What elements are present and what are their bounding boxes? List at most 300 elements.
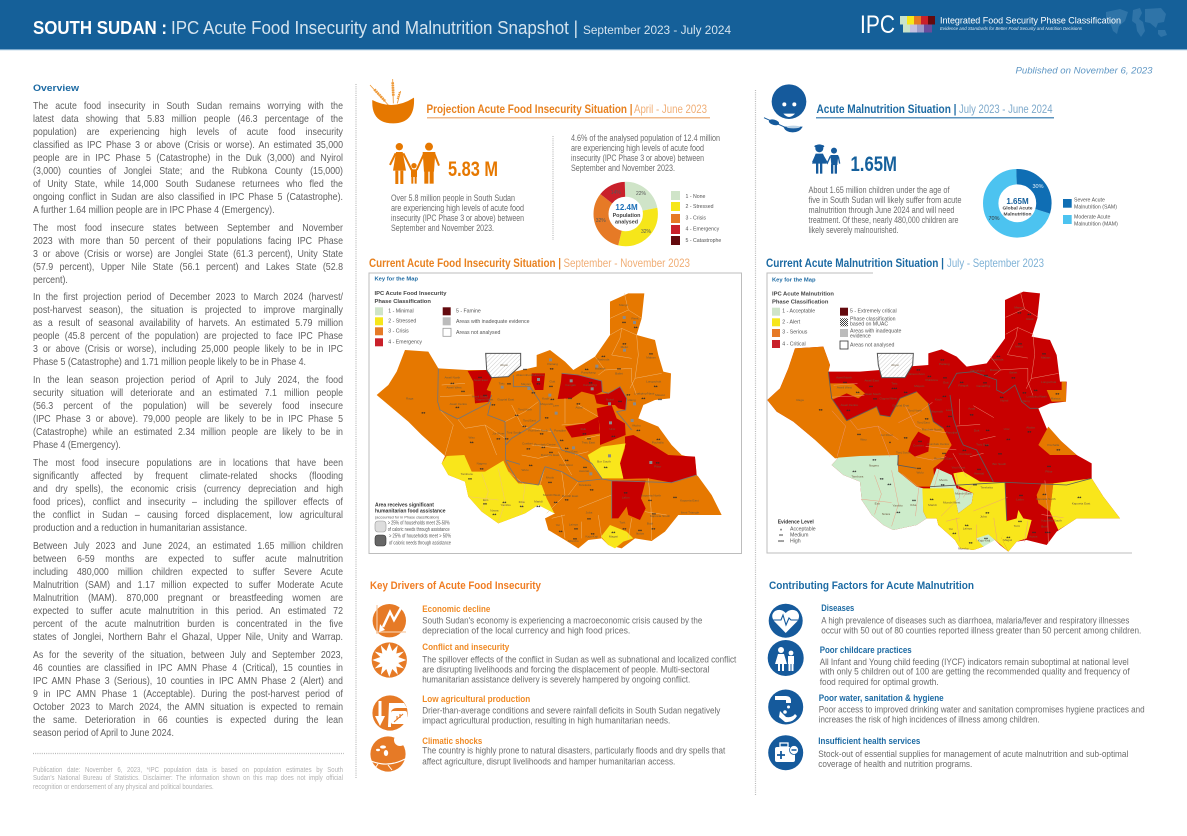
description right: 4.6% of the analysed population of 12.4 million [571, 133, 720, 143]
evidence markers: ** [470, 440, 474, 446]
county labels: Rumbek Centre [534, 442, 556, 446]
county labels: Mundri West [543, 493, 560, 497]
county labels: Lafon [1016, 497, 1024, 501]
driver text: conflict: Conflict and insecurity [422, 642, 509, 652]
evidence markers: ** [480, 467, 484, 473]
evidence markers: ** [587, 437, 591, 443]
driver text: economic decline: South Sudan's economy is experiencing a macroeconomic crisis caused by the [422, 616, 702, 626]
map legend: phases: 1 - Acceptable [782, 309, 815, 315]
county labels: Fashoda [597, 358, 610, 362]
evidence markers: ** [656, 438, 660, 444]
evidence markers: ** [970, 413, 974, 419]
paragraph 6: including 480,000 million children expected to suffer Severe Acute [33, 567, 343, 578]
county labels: Ezo [875, 501, 880, 505]
county labels: Mundri West [943, 500, 960, 504]
county labels: Rumbek East [934, 456, 953, 460]
county labels: Mayom [521, 382, 531, 386]
evidence markers: ** [658, 398, 662, 404]
map legend: phases: 3 - Crisis [388, 329, 409, 335]
evidence markers: ** [942, 451, 946, 457]
county labels: Longochuk [646, 379, 662, 383]
county labels: Akobo [1026, 425, 1035, 429]
county labels: Canal/Pigi [976, 384, 991, 388]
evidence markers: ** [565, 446, 569, 452]
county labels: Nagero [477, 461, 487, 465]
map legend: phases: evidence [850, 333, 871, 339]
evidence markers: ** [634, 325, 638, 331]
description left: Over 5.8 million people in South Sudan [391, 193, 515, 203]
evidence markers: ** [1027, 313, 1031, 319]
evidence markers: ** [927, 374, 931, 380]
donut legend: 1 - None [686, 194, 706, 200]
donut chart: SAM and MAM: 1.65M [1006, 197, 1029, 206]
section heading: April - June 2023 [634, 102, 707, 116]
county labels: Ezo [483, 498, 489, 502]
county labels: Ulang [1022, 399, 1030, 403]
county labels: Tonj East [523, 419, 536, 423]
evidence markers: ** [846, 409, 850, 415]
paragraph 1: classified as IPC Phase 3 or above (Crisis or worse). An estimated 35,000 [33, 140, 343, 151]
paragraph 7: season period of April to June 2024. [33, 728, 174, 739]
evidence markers: ** [526, 447, 530, 453]
overview heading: Overview [33, 83, 80, 94]
Abyei not analysed area [486, 353, 521, 378]
county labels: Gogrial East [497, 397, 514, 401]
evidence markers: *** [891, 386, 897, 392]
evidence markers: ** [872, 458, 876, 464]
evidence markers: ** [638, 529, 642, 535]
icon: diseases heart [769, 604, 803, 638]
paragraph 4: (Catastrophe) while an estimated 2.34 million people are likely to be in [33, 427, 343, 438]
county labels: Gogrial East [892, 404, 909, 408]
county labels: Tonj North [908, 409, 922, 413]
county labels: Ayod [968, 406, 975, 410]
county labels: Twic [499, 381, 505, 385]
county labels: Melut [621, 345, 628, 349]
paragraph 2: 3 or above (Crisis or worse) are Jonglei State (61.3 percent), Unity State [33, 249, 343, 260]
evidence markers: * [889, 440, 891, 446]
header banner [0, 0, 1187, 50]
evidence markers: ** [565, 498, 569, 504]
county labels: Mundri East [562, 494, 578, 498]
paragraph 3: Phase 5 (Catastrophe) and 1.71 million people likely to be in Phase 4. [33, 357, 306, 368]
county labels: Baliet [615, 371, 623, 375]
county labels: Torit [1014, 524, 1020, 528]
evidence markers: ** [819, 408, 823, 414]
county labels: Renk [1026, 317, 1034, 321]
donut chart: SAM and MAM: Malnutrition [1004, 212, 1032, 218]
donut chart: population phases: 32% [596, 218, 606, 224]
publication date: Published on November 6, 2023 [1016, 66, 1153, 76]
evidence markers [819, 311, 1081, 547]
county labels: Ibba [519, 500, 525, 504]
paragraph 6: Malnutrition (SAM) and 1.17 million expected to suffer Moderate Acute [33, 580, 343, 591]
donut chart: population phases: 12.4M [615, 203, 638, 212]
description: likely severely malnourished. [808, 225, 898, 235]
evidence markers: ** [483, 394, 487, 400]
evidence markers: ** [589, 381, 593, 387]
evidence markers: ** [1019, 493, 1023, 499]
evidence markers: *** [1045, 530, 1051, 536]
paragraph 7: IPC AMN Phase 3 (Serious), 10 counties in IPC AMN Phase 2 (Alert) and [33, 676, 343, 687]
county labels: Abyei [500, 363, 508, 367]
evidence markers: ** [912, 499, 916, 505]
map legend: evidence level: * [780, 528, 783, 534]
driver text: climate: affect agriculture, disrupt livelihoods and hamper humanitarian access. [422, 757, 675, 767]
section heading: Key Drivers of Acute Food Insecurity [370, 580, 542, 592]
county labels: Wulu [522, 468, 529, 472]
evidence markers: ** [930, 498, 934, 504]
county labels: Gogrial West [475, 397, 493, 401]
county labels: Yirol West [559, 463, 573, 467]
map legend: phases: IPC Acute Food Insecurity [374, 291, 447, 297]
map legend: evidence level: Medium [790, 532, 808, 538]
county labels: Koch [542, 396, 549, 400]
county labels: Malakal [990, 368, 1001, 372]
evidence markers: ** [856, 390, 860, 396]
factor text: diseases: Diseases [821, 603, 854, 613]
county labels: Yambio [501, 503, 511, 507]
icon: wheat bowl [370, 79, 414, 123]
stat: 1.65M: 1.65M [850, 152, 897, 176]
county labels: Kapoeta North [641, 494, 661, 498]
evidence markers: ** [656, 461, 660, 467]
paragraph 1: (3,000) counties of Jonglei State; and the Rubkona County (15,000) [33, 166, 343, 177]
paragraph 2: (57.9 percent), Upper Nile State (56.1 percent) and Lakes State (52.8 [33, 262, 343, 273]
paragraph 5: the conflict in Sudan – causing forced displacement, low agricultural [33, 510, 343, 521]
county labels: Maban [1041, 356, 1051, 360]
evidence markers: ** [568, 396, 572, 402]
county labels: Abiemnhom [516, 373, 533, 377]
map legend: food assistance: Area receives significant [375, 503, 434, 509]
evidence markers: ** [450, 381, 454, 387]
map legend: phases: Areas with inadequate [850, 329, 901, 335]
map legend: evidence level: Evidence Level [778, 520, 814, 526]
county labels: Tambura [461, 472, 473, 476]
heading: current food insecurity: September - November 2023 [564, 256, 690, 270]
evidence markers: ** [536, 382, 540, 388]
map legend: phases: Key for the Map [374, 277, 418, 283]
county labels: Akobo [632, 424, 641, 428]
donut legend: 3 - Crisis [686, 216, 706, 222]
evidence markers: ** [962, 448, 966, 454]
county labels: Aweil North [836, 376, 852, 380]
evidence markers: ** [622, 342, 626, 348]
map legend: food assistance: > 25% of households meet 25-50% [388, 520, 450, 526]
map legend: phases [374, 277, 530, 346]
driver text: climate: Climatic shocks [422, 736, 482, 746]
paragraph 7: October 2023 to March 2024, the AMN situation is expected to remain [33, 702, 343, 713]
county labels: Kajo-Keji [586, 535, 598, 539]
state boundaries [438, 368, 697, 518]
icon: climatic shocks [370, 734, 406, 772]
evidence markers: ** [549, 384, 553, 390]
county labels: Wau [860, 437, 867, 441]
evidence markers: ** [941, 483, 945, 489]
donut chart: SAM and MAM: 70% [988, 216, 1000, 222]
evidence markers: ** [1006, 535, 1010, 541]
county labels: Longochuk [1041, 380, 1057, 384]
county labels: Yirol East [564, 450, 578, 454]
driver text: economic decline [422, 604, 702, 636]
evidence markers: ** [652, 512, 656, 518]
vertical dividers [33, 84, 756, 795]
factor text: childcare [819, 645, 1130, 687]
map legend: evidence level [778, 520, 816, 546]
county labels: Kajo-Keji [978, 539, 990, 543]
county labels: Pariang [547, 362, 558, 366]
county labels: Ikotos [636, 531, 645, 535]
evidence markers: ** [505, 437, 509, 443]
panel: projection food insecurity [370, 79, 721, 245]
evidence markers: ** [649, 352, 653, 358]
evidence markers: ** [946, 425, 950, 431]
paragraph 5 [33, 458, 343, 534]
evidence markers: ** [873, 397, 877, 403]
description: five in South Sudan will likely suffer from acute [808, 195, 962, 205]
paragraph 7: 9 in IPC AMN Phase 1 (Acceptable). During the post-harvest period of [33, 689, 343, 700]
evidence markers: ** [1011, 376, 1015, 382]
footer disclaimer: Publication date: November 6, 2023, *IPC population data is based on population estimates by South [33, 765, 343, 774]
county labels: Uror [609, 427, 615, 431]
evidence markers: ** [1055, 392, 1059, 398]
evidence markers: ** [1018, 342, 1022, 348]
county labels: Maridi [534, 500, 543, 504]
county labels: Cueibet [522, 441, 533, 445]
county labels: Yirol West [951, 465, 965, 469]
paragraph 3: 3 or above (Crisis or worse), including 25,000 people likely to be in IPC [33, 344, 343, 355]
county labels: Awerial [974, 471, 984, 475]
county labels: Morobo [958, 546, 969, 550]
map legend: phases: 5 - Famine [456, 309, 481, 315]
paragraph 1: The acute food insecurity in South Sudan remains worrying with the [33, 101, 343, 112]
evidence markers: ** [507, 382, 511, 388]
evidence markers: ** [998, 452, 1002, 458]
driver text: climate [422, 736, 726, 767]
paragraph 6: between 6-59 months are expected to suffer acute malnutrition [33, 554, 343, 565]
county labels: Kapoeta South [650, 514, 670, 518]
evidence markers: ** [673, 495, 677, 501]
evidence markers: ** [583, 465, 587, 471]
donut chart: population phases: 14% [611, 190, 621, 196]
evidence markers: ** [965, 524, 969, 530]
factor text: diseases: A high prevalence of diseases such as diarrhoea, malaria/fever and respiratory illnesses [821, 616, 1130, 626]
evidence markers: ** [918, 440, 922, 446]
description: malnutrition through June 2024 and will need [808, 205, 955, 215]
county labels: Luakpiny/Nasir [1026, 395, 1047, 399]
evidence markers: ** [491, 403, 495, 409]
map legend: phases: 3 - Serious [782, 330, 808, 336]
map legend: food assistance [375, 503, 451, 546]
paragraph 7: 46 counties are classified in IPC AMN Phase 4 (Critical), 15 counties in [33, 663, 343, 674]
evidence markers: ** [601, 354, 605, 360]
evidence markers: ** [550, 398, 554, 404]
county labels: Nagero [869, 464, 879, 468]
icon: water tap [768, 690, 803, 724]
donut legend [1063, 198, 1118, 228]
paragraph 2: percent). [33, 275, 68, 286]
county labels: Wulu [917, 471, 924, 475]
factor text: diseases: occur with 50 out of 80 counties reported illness greater than 50 percent among children. [821, 626, 1141, 636]
county labels: Abiemnhom [908, 372, 925, 376]
description left: September and November 2023. [391, 223, 494, 233]
evidence markers: ** [869, 384, 873, 390]
map legend: phases: Areas not analysed [850, 342, 895, 348]
icon: child face with spoon [764, 84, 806, 132]
evidence markers: ** [611, 530, 615, 536]
evidence markers: ** [983, 381, 987, 387]
icon: children [812, 144, 840, 174]
county labels: Awerial [579, 469, 589, 473]
evidence markers: ** [483, 502, 487, 508]
factor text: childcare: with only 5 children out of 100 are getting the recommended quality and frequency of [819, 667, 1130, 677]
evidence markers: ** [573, 537, 577, 543]
factor text: childcare: food required for optimal growth. [820, 677, 939, 687]
map legend: phases: 4 - Critical [782, 342, 806, 348]
paragraph 5: food prices), conflict and insecurity – including the spillover effects of [33, 497, 343, 508]
driver text: conflict: are disrupting livelihoods and forcing the displacement of people. Multi-sectoral [422, 665, 709, 675]
factor text: water: Poor water, sanitation & hygiene [819, 693, 944, 703]
driver text: conflict [422, 642, 737, 685]
evidence markers: ** [550, 367, 554, 373]
county labels: Jur River [881, 433, 893, 437]
county labels: Ayod [576, 405, 583, 409]
evidence markers: ** [952, 532, 956, 538]
evidence markers: ** [904, 390, 908, 396]
county labels: Aweil Centre [841, 403, 858, 407]
evidence markers: ** [496, 437, 500, 443]
evidence markers: ** [1034, 388, 1038, 394]
donut legend: Moderate Acute [1074, 214, 1110, 220]
county labels: Terekeka [579, 483, 592, 487]
evidence markers: ** [531, 391, 535, 397]
county labels: Twic [891, 381, 898, 385]
evidence markers: ** [624, 491, 628, 497]
evidence markers: ** [455, 405, 459, 411]
county labels: Aweil East [865, 379, 879, 383]
evidence markers: ** [940, 358, 944, 364]
county labels: Fangak [566, 383, 576, 387]
county labels: Rumbek North [528, 429, 549, 433]
paragraph 3: people (45.8 percent of the population) are projected to face IPC Phase [33, 331, 343, 342]
factor text: diseases [821, 603, 1141, 636]
evidence markers: ** [977, 468, 981, 474]
description left: insecurity (IPC Phase 3 or above) between [391, 213, 524, 223]
county labels: Magwi [1003, 538, 1012, 542]
evidence markers: ** [943, 376, 947, 382]
county labels: Mayom [914, 384, 925, 388]
county labels: Pochalla [652, 441, 664, 445]
evidence markers: ** [1042, 492, 1046, 498]
donut chart: SAM and MAM [988, 177, 1044, 230]
county labels: Yei [949, 527, 953, 531]
map legend: evidence level: Acceptable [790, 527, 816, 533]
description right: September and November 2023. [571, 163, 675, 173]
county labels: Kapoeta East [1072, 501, 1090, 505]
county labels: Wau [469, 436, 475, 440]
paragraph 1: people are in IPC Phase 5 (Catastrophe) in the Duk (3,000) and Nyirol [33, 153, 343, 164]
county labels: Rumbek North [922, 427, 942, 431]
driver text: agriculture [422, 694, 721, 726]
description left [391, 193, 524, 233]
evidence markers: ** [618, 399, 622, 405]
county labels: Juba [586, 511, 593, 515]
county labels: Manyo [1014, 305, 1024, 309]
evidence markers: ** [585, 368, 589, 374]
county labels: Magwi [609, 535, 618, 539]
evidence markers: ** [540, 432, 544, 438]
evidence markers: ** [969, 541, 973, 547]
factor text: health services: Stock-out of essential supplies for management of acute malnutrition and sub-optimal [818, 749, 1128, 759]
county labels: Morobo [568, 539, 579, 543]
map legend: food assistance: of caloric needs through assistance [388, 527, 450, 533]
county labels: Tonj East [917, 420, 930, 424]
Abyei not analysed area [877, 353, 913, 378]
county labels: Aweil West [446, 385, 462, 389]
evidence markers: ** [896, 510, 900, 516]
icon: childcare [768, 640, 804, 676]
county labels: Lainya [963, 526, 972, 530]
county labels: Malakal [595, 366, 606, 370]
donut chart: SAM and MAM: 30% [1032, 184, 1044, 190]
donut chart: population phases: Population [613, 213, 640, 219]
county labels: Aweil North [444, 376, 460, 380]
county labels: Tonj South [507, 431, 522, 435]
description right: insecurity (IPC Phase 3 or above) between [571, 153, 704, 163]
paragraph 3 [33, 292, 343, 368]
paragraph 4: security situation will deteriorate and an estimated 7.1 million people [33, 388, 343, 399]
evidence markers: ** [549, 450, 553, 456]
county labels: Kapoeta North [1036, 497, 1056, 501]
paragraph 7: the same. Deterioration in 66 counties is expected during the lean [33, 715, 343, 726]
icon: low agricultural production [372, 695, 408, 731]
donut chart: population phases: analysed [615, 220, 638, 226]
county labels: Luakpiny/Nasir [634, 391, 655, 395]
paragraph 4: (56.3 percent of the population) will be severely food insecure [33, 401, 343, 412]
paragraph 4 [33, 375, 343, 451]
paragraph 6 [33, 541, 343, 643]
evidence markers: ** [1027, 430, 1031, 436]
evidence markers: ** [523, 368, 527, 374]
evidence markers: ** [582, 432, 586, 438]
evidence markers: ** [1022, 391, 1026, 397]
county labels: Ilemi Triangle [681, 511, 699, 515]
donut legend: 2 - Stressed [686, 204, 714, 210]
county labels: Nyirol [1000, 399, 1009, 403]
county labels [406, 303, 699, 543]
evidence markers: ** [942, 394, 946, 400]
evidence markers: ** [996, 354, 1000, 360]
evidence markers: ** [985, 511, 989, 517]
driver text: agriculture: impact agricultural production, resulting in high humanitarian needs. [422, 716, 670, 726]
paragraph 2 [33, 223, 343, 286]
map legend: phases [772, 278, 901, 349]
paragraph 6: states of Jonglei, Northern Bahr el Ghazal, Upper Nile, Unity and Warrap. [33, 632, 343, 643]
evidence markers: ** [587, 517, 591, 523]
description: About 1.65 million children under the age of [808, 185, 950, 195]
county labels: Juba [980, 515, 987, 519]
county labels: Bor South [992, 462, 1006, 466]
county labels: Leer [553, 404, 559, 408]
evidence markers: ** [545, 416, 549, 422]
heading: current food insecurity: Current Acute Food Insecurity Situation | [369, 256, 561, 270]
county labels: Budi [1041, 525, 1048, 529]
county labels: Rumbek Centre [928, 442, 949, 446]
county labels: Twic East [582, 441, 595, 445]
factor text: water [819, 693, 1145, 725]
county labels: Ikotos [1029, 535, 1038, 539]
description: treatment. Of these, nearly 480,000 children are [808, 215, 959, 225]
